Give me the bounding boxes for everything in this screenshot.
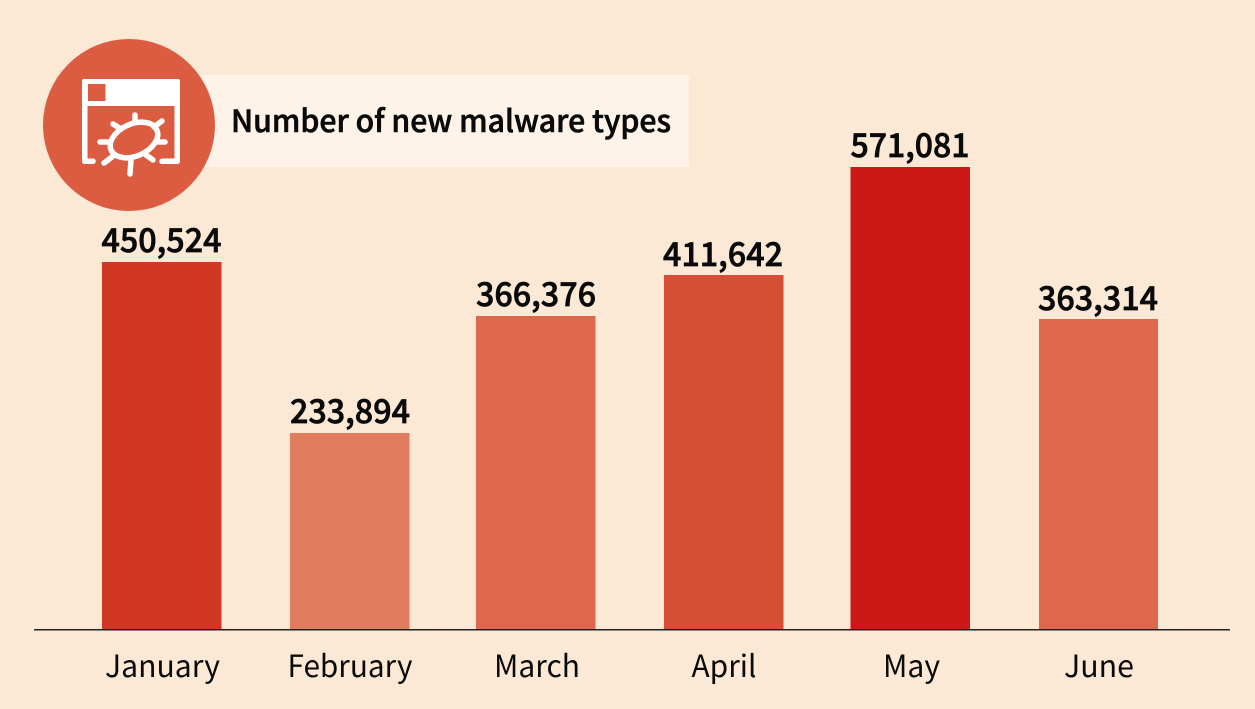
month labels: June xyxy=(1064,642,1134,686)
title banner: Number of new malware types xyxy=(231,97,671,141)
bar chart xyxy=(34,119,1230,686)
bar: January: 450,524 xyxy=(102,214,222,262)
icon: malware bug in browser window xyxy=(43,39,215,211)
bar: June: 363,314 xyxy=(1038,272,1158,320)
bar: January xyxy=(102,214,222,630)
bar: May: 571,081 xyxy=(850,119,970,167)
bar: April xyxy=(663,228,784,630)
month labels: March xyxy=(494,642,580,686)
bar: March: 366,376 xyxy=(476,268,596,316)
bar: February xyxy=(290,385,410,630)
bar: March xyxy=(476,268,596,630)
month labels: May xyxy=(883,642,940,686)
bar: May xyxy=(850,119,970,630)
month labels xyxy=(105,642,1134,686)
month labels: January xyxy=(105,642,220,686)
title banner xyxy=(180,75,689,167)
bar: April: 411,642 xyxy=(663,228,783,276)
month labels: April xyxy=(692,642,756,686)
month labels: February xyxy=(288,642,413,686)
bar: February: 233,894 xyxy=(290,385,410,433)
bar: June xyxy=(1038,272,1158,630)
